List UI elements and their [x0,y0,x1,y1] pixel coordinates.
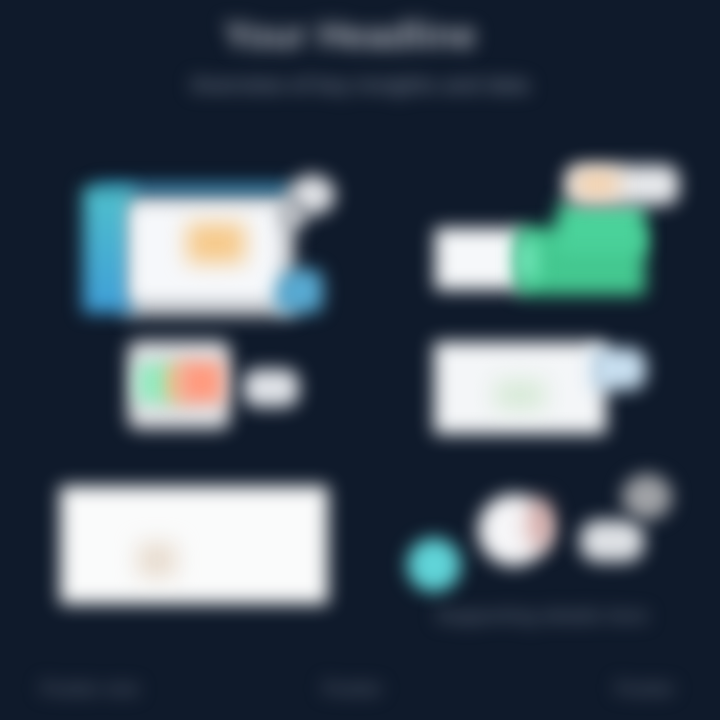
amber swatch [167,365,183,401]
window sidebar [83,187,133,313]
footer right: Footer [615,679,675,700]
panel: right middle card [419,327,660,449]
teal circle icon [407,538,461,592]
caption: Supporting details here [436,606,648,627]
window frame [125,191,295,317]
panel: small colour card [113,326,313,444]
subtitle: Overview of key insights and data [191,74,529,97]
white label block [435,228,523,290]
card tab [590,348,646,390]
red swatch [179,361,223,403]
chart hint [495,380,545,410]
tall green bars [557,203,645,253]
pie icon [478,494,550,566]
small bubble [622,474,672,520]
window top bar [95,183,290,197]
panel: bottom right icons [394,462,684,630]
corner blue block [275,269,323,313]
window body [129,203,283,303]
cloud icon [580,520,644,562]
panel: browser window top left [69,162,348,331]
panel: green bar chart top right [420,149,694,309]
card body [434,342,606,434]
bubble callout [565,165,679,205]
chart hint [138,543,176,577]
corner badge icon [289,175,335,215]
pie accent [528,498,552,550]
green swatch [137,363,173,403]
footer left: Footer one [41,679,139,700]
panel: wide bottom left card [44,470,344,620]
bubble accent [575,171,619,197]
card body [60,486,328,604]
card [128,341,230,429]
footer center: Footer [323,679,382,700]
green bars base [517,227,645,295]
side pill [243,369,299,407]
light bar stripe [517,240,537,280]
chart accent [187,223,245,263]
badge connector [279,203,305,227]
title: Your Headline [224,15,476,57]
